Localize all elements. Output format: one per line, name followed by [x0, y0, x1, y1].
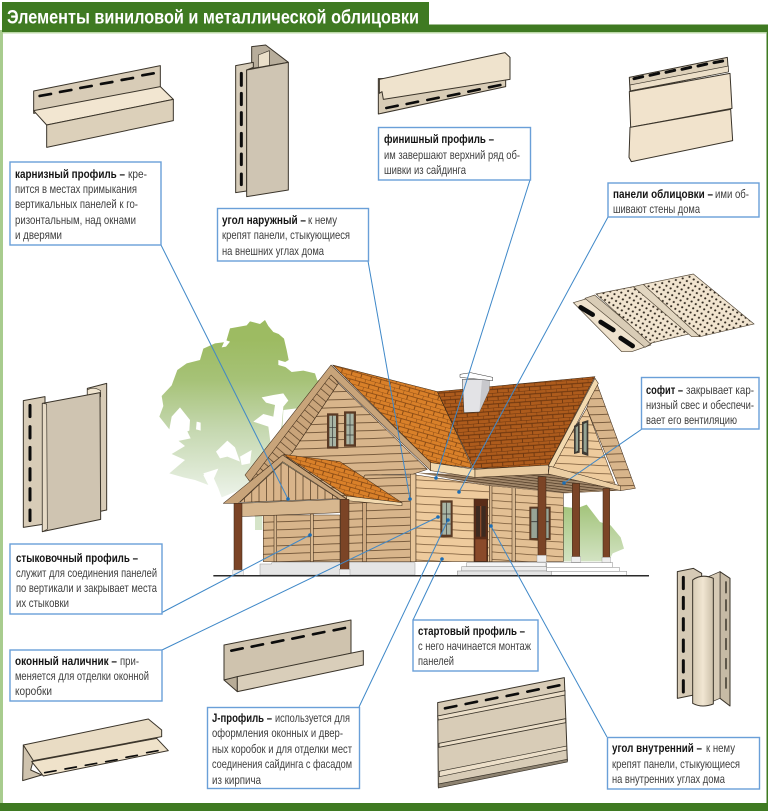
porch ceiling: [416, 473, 620, 493]
chimney: [460, 373, 493, 413]
right roof: [437, 377, 595, 469]
background tree left: [159, 320, 327, 530]
front roof: [283, 454, 402, 503]
callout: soffit: закрывает кар-: [686, 383, 754, 397]
house illustration: [213, 365, 649, 576]
centre wall: [416, 475, 489, 562]
beam: [238, 499, 340, 517]
left roof: [333, 365, 473, 468]
icon: finishing profile: [378, 53, 510, 114]
callout: outer corner: угол наружный –: [222, 213, 306, 227]
callout: window trim: при-: [120, 654, 139, 668]
callout: window trim: коробки: [15, 684, 52, 698]
callout: drip cap: карнизный профиль –: [15, 167, 125, 181]
callout: joint profile: [10, 544, 162, 614]
porch columns: [537, 477, 611, 563]
callout: drip cap: и дверями: [15, 228, 62, 242]
callout: drip cap: [10, 162, 161, 245]
main gable wall: [283, 383, 427, 500]
right wall: [489, 486, 563, 562]
icon: inner corner: [677, 568, 730, 706]
callout: inner corner: [608, 738, 760, 789]
garage wall: [263, 515, 340, 562]
callout: drip cap: вертикальных панелей к го-: [15, 197, 138, 211]
callout: starter profile: стартовый профиль –: [418, 624, 525, 638]
callout: joint profile: по вертикали и закрывает места: [16, 581, 157, 595]
callout: window trim: оконный наличник –: [15, 654, 117, 668]
icon: J-profile: [224, 620, 363, 692]
callout: starter profile: панелей: [418, 654, 454, 668]
foundation: [260, 563, 415, 575]
right gable wall: [550, 408, 617, 488]
callout: drip cap: пится в местах примыкания: [15, 182, 137, 196]
callout: cladding panels: [608, 183, 759, 217]
callout: inner corner: к нему: [706, 741, 735, 755]
callout: finishing profile: им завершают верхний ряд об-: [384, 148, 520, 162]
porch steps: [457, 563, 627, 575]
callout: finishing profile: [378, 128, 530, 180]
icon: window trim: [23, 719, 168, 781]
leader lines: [161, 180, 642, 737]
callout: joint profile: служит для соединения панелей: [16, 566, 157, 580]
callout: starter profile: [413, 620, 538, 671]
front gable soffit: [223, 455, 347, 503]
callout: cladding panels: ими об-: [715, 187, 749, 201]
callout: outer corner: к нему: [308, 213, 337, 227]
left gable soffit: [248, 373, 338, 480]
right wall window: [529, 507, 551, 540]
title bar: [2, 2, 768, 32]
windows upper: [327, 411, 356, 449]
icon: cladding panel: [629, 57, 733, 162]
ground line: [213, 575, 649, 576]
callout: inner corner: на внутренних углах дома: [612, 772, 725, 786]
callout: outer corner: на внешних углах дома: [222, 244, 324, 258]
callout: cladding panels: панели облицовки –: [613, 187, 713, 201]
callout: window trim: меняется для отделки оконной: [15, 669, 149, 683]
callout: window trim: [10, 650, 162, 701]
callout: J-profile: из кирпича: [212, 773, 261, 787]
title bar: Элементы виниловой и металлической облицовки: [7, 8, 419, 28]
centre window: [440, 500, 453, 537]
windows right gable: [574, 420, 588, 456]
fascia: [431, 463, 475, 477]
left wall: [348, 475, 412, 562]
callout: drip cap: ризонтальным, над окнами: [15, 213, 136, 227]
callout: J-profile: используется для: [275, 711, 350, 725]
callout: soffit: [642, 378, 759, 429]
callout: joint profile: их стыковки: [16, 596, 69, 610]
callout: J-profile: J-профиль –: [212, 711, 272, 725]
callout: outer corner: [218, 208, 368, 261]
front columns: [233, 499, 350, 575]
icon: drip cap profile: [34, 66, 173, 147]
icon: outer corner: [236, 45, 288, 197]
callout: finishing profile: шивки из сайдинга: [384, 163, 466, 177]
main barge board: [245, 365, 431, 482]
icon: soffit panel: [573, 274, 754, 352]
icon: starter panel: [438, 678, 567, 788]
callout: J-profile: соединения сайдинга с фасадом: [212, 757, 352, 771]
callout: soffit: софит –: [646, 383, 683, 397]
callout: starter profile: с него начинается монтаж: [418, 639, 531, 653]
callout: outer corner: крепят панели, стыкующиеся: [222, 228, 350, 242]
callout: soffit: вает его вентиляцию: [646, 413, 737, 427]
front gable boards: [240, 463, 338, 502]
callout: J-profile: ных коробок и для отделки мест: [212, 742, 352, 756]
callout: drip cap: кре-: [128, 167, 147, 181]
door: [474, 499, 488, 562]
callout: joint profile: стыковочный профиль –: [16, 551, 138, 565]
callout: J-profile: оформления оконных и двер-: [212, 726, 343, 740]
background tree right: [563, 505, 624, 561]
right gable barge boards: [587, 378, 635, 491]
icon: joint profile: [23, 383, 107, 532]
callout: cladding panels: шивают стены дома: [613, 202, 700, 216]
callout: finishing profile: финишный профиль –: [384, 132, 494, 146]
callout: inner corner: угол внутренний –: [612, 741, 702, 755]
callout: J-profile: [208, 708, 360, 788]
